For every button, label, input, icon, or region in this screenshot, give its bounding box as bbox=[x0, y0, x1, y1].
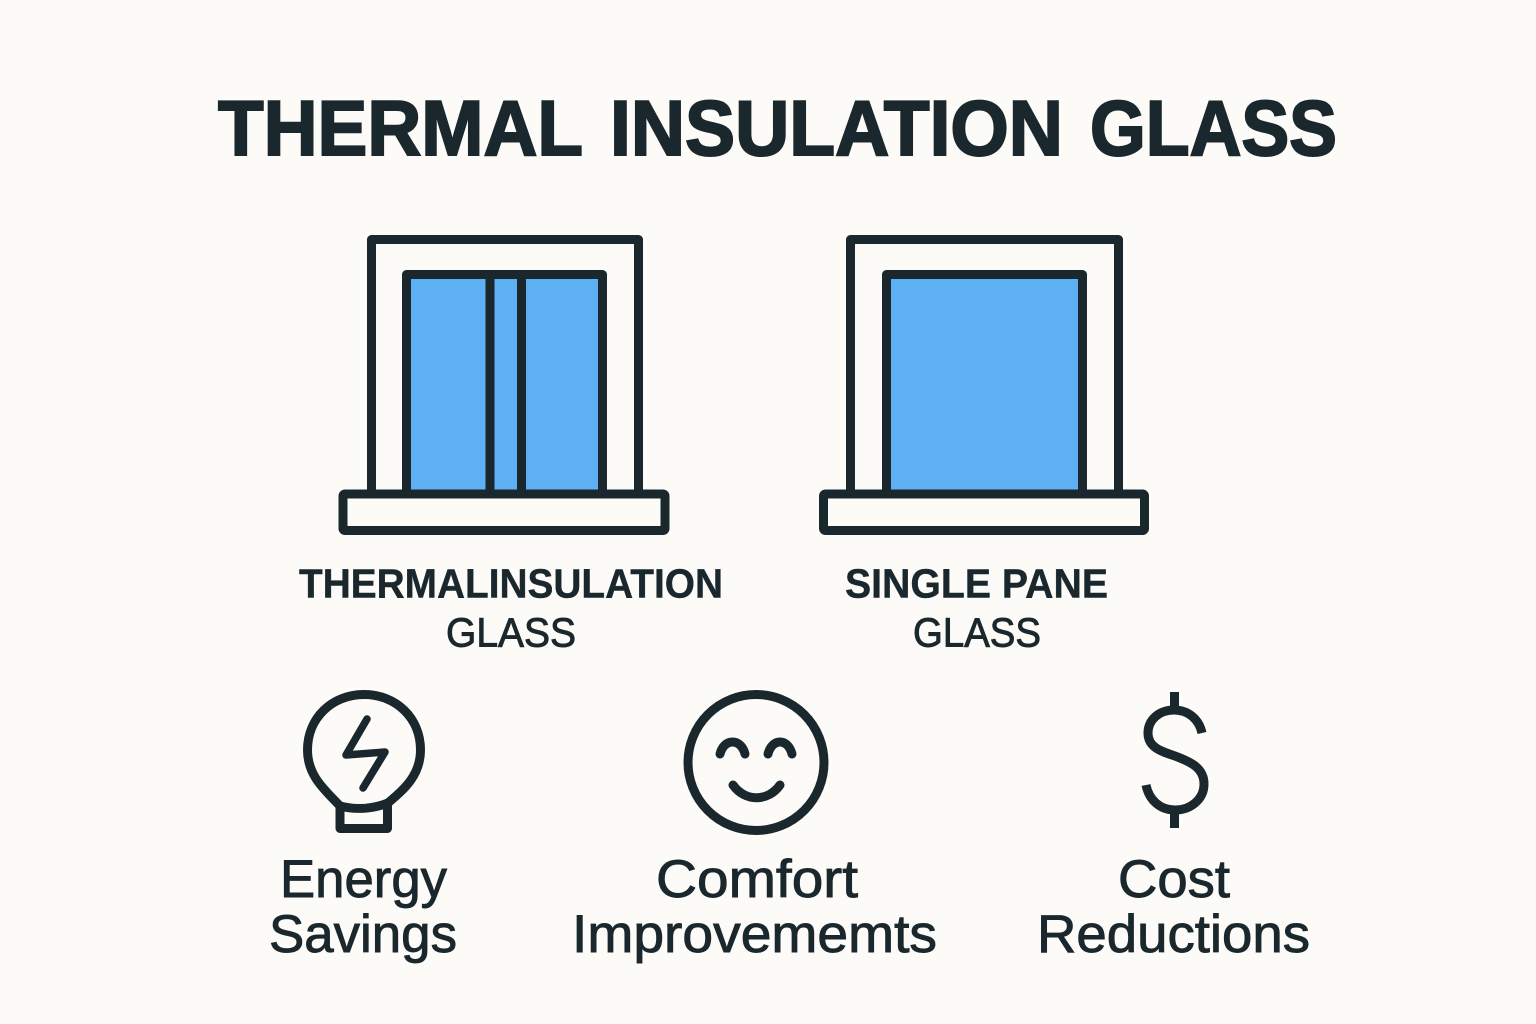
label: energy savings bbox=[269, 850, 457, 964]
label: energy savings: Energy bbox=[280, 850, 447, 909]
blue glass pane bbox=[886, 275, 1082, 494]
title: THERMAL bbox=[218, 84, 583, 172]
icon: light bulb with lightning bolt bbox=[308, 694, 420, 828]
title bbox=[218, 84, 1337, 172]
panel: thermal insulation glass window bbox=[343, 240, 665, 530]
label: energy savings: Savings bbox=[269, 905, 457, 964]
icon: smiling face bbox=[688, 694, 824, 830]
label: comfort improvements: Improvememts bbox=[572, 905, 937, 964]
label: single pane glass: GLASS bbox=[913, 610, 1041, 656]
panel: single pane glass window bbox=[824, 240, 1144, 530]
window sill bbox=[343, 494, 665, 530]
inner window frame bbox=[886, 274, 1082, 494]
label: cost reductions bbox=[1037, 850, 1310, 964]
label: single pane glass bbox=[845, 560, 1108, 656]
label: thermal insulation glass: THERMALINSULATION bbox=[299, 560, 723, 606]
inner window frame with double-pane dividers bbox=[406, 274, 602, 494]
title: GLASS bbox=[1090, 84, 1337, 172]
window sill bbox=[824, 494, 1144, 530]
label: cost reductions: Reductions bbox=[1037, 905, 1310, 964]
label: cost reductions: Cost bbox=[1118, 850, 1230, 909]
outer window frame bbox=[372, 240, 638, 494]
label: thermal insulation glass bbox=[299, 560, 723, 656]
title: INSULATION bbox=[610, 84, 1063, 172]
label: single pane glass: SINGLE PANE bbox=[845, 560, 1108, 606]
label: thermal insulation glass: GLASS bbox=[446, 610, 576, 656]
blue glass panes bbox=[407, 275, 602, 494]
label: comfort improvements: Comfort bbox=[656, 850, 858, 909]
outer window frame bbox=[850, 240, 1118, 494]
icon: dollar sign bbox=[1146, 692, 1204, 828]
label: comfort improvements bbox=[572, 850, 937, 964]
